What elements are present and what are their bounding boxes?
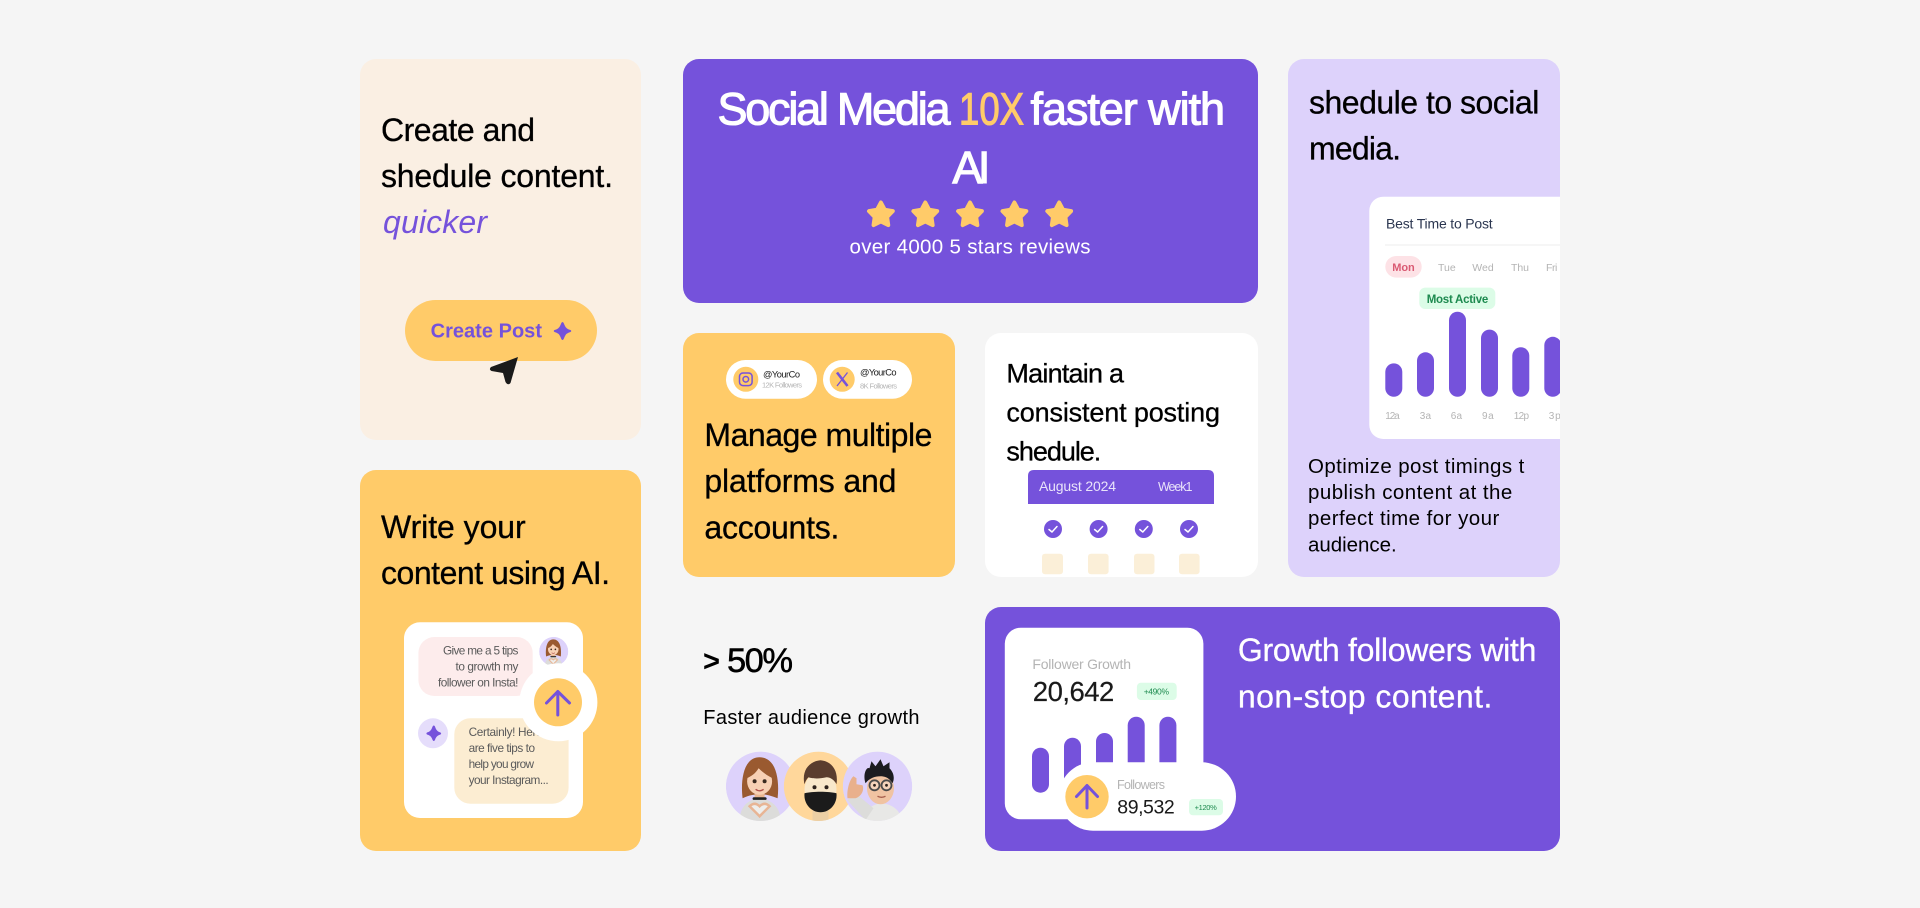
text: optimize post timings: publish content at the [1308, 481, 1512, 504]
bento infographic [360, 59, 1560, 851]
panel: write content using ai [360, 470, 641, 851]
chat bubble: ai reply: help you grow [469, 757, 534, 771]
calendar day squares [1042, 554, 1200, 574]
heading: social media 10x faster with ai: Social Media [718, 83, 951, 134]
heading: growth followers with non-stop content: non-stop content. [1238, 679, 1492, 715]
card background: cream [360, 59, 641, 440]
stat: greater than 50 percent: > [703, 645, 720, 678]
callout: followers count: Followers [1117, 778, 1165, 792]
calendar header: August 2024 [1039, 478, 1116, 494]
icon: ai sparkle [418, 718, 448, 748]
badge: plus 490 percent [1137, 683, 1177, 700]
badge: plus 120 percent [1189, 799, 1223, 815]
heading: write your content using ai: Write your [381, 509, 526, 545]
hour labels: 9a [1482, 411, 1494, 422]
icon: five stars rating [869, 202, 1071, 225]
heading: write your content using ai: content using AI. [381, 555, 610, 591]
text: optimize post timings: perfect time for your [1308, 507, 1499, 530]
heading: maintain a consistent posting shedule: Maintain a [1006, 359, 1125, 389]
heading: social media 10x faster with ai: AI [952, 142, 990, 193]
heading: shedule to social media: shedule to social [1309, 85, 1539, 121]
button: create post [405, 300, 597, 361]
day tabs: Fri [1546, 262, 1557, 274]
heading: manage multiple platforms and accounts: accounts. [704, 509, 839, 545]
heading: manage multiple platforms and accounts: Manage multiple [704, 417, 932, 453]
heading: growth followers with non-stop content [1238, 632, 1536, 715]
card: follower growth chart: Follower Growth [1032, 656, 1131, 672]
day tabs: Thu [1511, 262, 1529, 274]
card background: purple [985, 607, 1560, 851]
button: create post: Create Post [431, 321, 542, 343]
icon: x logo [837, 372, 848, 386]
icon: up arrow [1076, 786, 1098, 808]
chat mockup [404, 622, 597, 818]
card background: lilac [1288, 59, 1560, 577]
heading: shedule to social media [1309, 85, 1539, 166]
card background: yellow [683, 333, 955, 577]
panel: manage multiple platforms [683, 333, 955, 577]
icon: instagram [740, 373, 752, 386]
panel: hero headline [683, 59, 1258, 303]
heading: create and shedule content [381, 112, 613, 240]
heading: manage multiple platforms and accounts [704, 417, 932, 545]
card: follower growth chart: 20,642 [1033, 676, 1114, 707]
icon: sparkle [554, 322, 571, 340]
heading: manage multiple platforms and accounts: platforms and [704, 463, 896, 499]
avatar: user [539, 637, 568, 666]
bars [1032, 717, 1176, 798]
chat bubble: user prompt: follower on Insta! [438, 675, 518, 689]
account pill: x: @YourCo [860, 367, 896, 377]
account pill: instagram: @YourCo [763, 369, 800, 379]
hour labels: 3p [1549, 411, 1561, 422]
panel: growth followers [985, 607, 1560, 851]
heading: social media 10x faster with ai: 10X [959, 83, 1024, 134]
account pill: instagram: 12K Followers [762, 380, 802, 389]
card background: yellow [360, 470, 641, 851]
account pill: instagram [726, 360, 817, 399]
panel: create and schedule content [360, 59, 641, 440]
card: follower growth chart [1005, 628, 1203, 819]
hour labels [1386, 412, 1560, 421]
text: optimize post timings [1308, 455, 1525, 556]
calendar checkmarks [1044, 520, 1198, 538]
text: optimize post timings: Optimize post timings t [1308, 455, 1525, 478]
day tabs: Tue [1438, 262, 1456, 274]
chat bubble: user prompt [418, 637, 533, 696]
hour labels: 3a [1420, 411, 1431, 422]
heading: create and shedule content: Create and [381, 112, 535, 148]
day tabs: Mon [1392, 262, 1415, 274]
text: reviews count: over 4000 5 stars reviews [850, 235, 1090, 258]
chart: best time to post: Best Time to Post [1386, 216, 1493, 232]
heading: create and shedule content: shedule content. [381, 158, 613, 194]
calendar header: Week1 [1158, 480, 1192, 494]
callout: followers count [1059, 762, 1236, 831]
account pill: x [823, 360, 912, 399]
chat bubble: ai reply: are five tips to [469, 741, 535, 755]
panel: consistent posting schedule [985, 333, 1258, 577]
hour labels: 6a [1451, 411, 1462, 422]
panel: faster audience growth stat [703, 642, 920, 824]
bars [1385, 312, 1561, 397]
heading: shedule to social media: media. [1309, 130, 1401, 166]
icon: send arrow button [519, 663, 597, 741]
heading: maintain a consistent posting shedule [1006, 359, 1220, 466]
day tabs [1385, 256, 1557, 278]
hour labels: 12p [1514, 411, 1529, 422]
tag: most active [1419, 288, 1495, 309]
day tabs: Wed [1472, 262, 1494, 274]
card background: white [985, 333, 1258, 577]
hour labels: 12a [1385, 411, 1400, 422]
text: faster audience growth: Faster audience growth [703, 707, 920, 729]
icon: mouse cursor [490, 357, 518, 384]
callout: followers count: 89,532 [1117, 796, 1175, 818]
account pill: x: 8K Followers [860, 381, 897, 390]
heading: write your content using ai [381, 509, 610, 591]
heading: social media 10x faster with ai: faster with [1030, 83, 1225, 134]
heading: social media 10x faster with ai [718, 83, 1225, 193]
card background: purple [683, 59, 1258, 303]
chat bubble: user prompt: Give me a 5 tips [443, 644, 518, 658]
stat: greater than 50 percent: 50% [727, 642, 793, 680]
tag: most active: Most Active [1427, 294, 1488, 306]
chat bubble: user prompt: to growth my [456, 660, 518, 674]
calendar header [1028, 470, 1214, 504]
avatars group [726, 752, 912, 824]
chat bubble: ai reply: Certainly! Here [469, 725, 543, 739]
badge: plus 490 percent: +490% [1144, 686, 1169, 696]
chat bubble: ai reply: your Instagram... [469, 773, 549, 787]
panel: schedule to social media [1288, 59, 1560, 577]
heading: maintain a consistent posting shedule: shedule. [1006, 436, 1101, 466]
heading: growth followers with non-stop content: Growth followers with [1238, 632, 1536, 668]
heading: create and shedule content: quicker [383, 204, 488, 240]
chat bubble: ai reply [454, 718, 569, 804]
badge: plus 120 percent: +120% [1195, 803, 1217, 812]
heading: maintain a consistent posting shedule: consistent posting [1006, 397, 1220, 427]
chart: best time to post [1369, 196, 1560, 439]
text: optimize post timings: audience. [1308, 533, 1397, 556]
